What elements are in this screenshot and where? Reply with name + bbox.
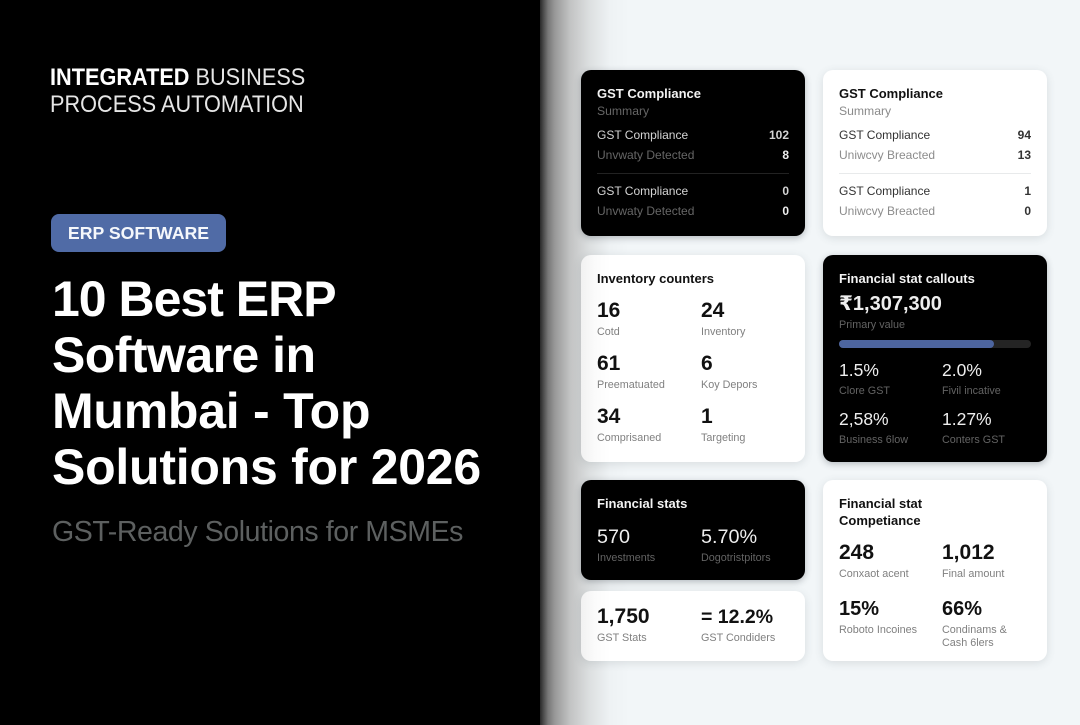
- stat: 2,58%: 2,58%: [839, 409, 889, 429]
- row: second compliance count: [597, 184, 789, 198]
- stat: 16: Cotd: [597, 326, 620, 338]
- card subheading: Summary: [839, 104, 891, 118]
- stat: 2.0%: [942, 360, 1001, 397]
- main title: Solutions for 2026: [52, 439, 481, 495]
- row: compliance count: GST Compliance: [597, 128, 688, 142]
- row: second compliance count: [839, 184, 1031, 198]
- panel: inventory counters: [581, 255, 805, 462]
- panel: GST compliance dark card: [581, 70, 805, 236]
- row: second detected count: 0: [782, 204, 789, 218]
- stat: 2,58%: [839, 409, 908, 446]
- stat: 5.70%: 5.70%: [701, 526, 757, 548]
- stat: 2,58%: Business 6low: [839, 434, 908, 446]
- stat: 34: Comprisaned: [597, 432, 661, 444]
- stat: 1: Targeting: [701, 432, 745, 444]
- row: compliance count: 94: [1018, 128, 1031, 142]
- progress bar: [839, 340, 1031, 348]
- stat: 12.2%: GST Condiders: [701, 632, 775, 644]
- stat: 15%: Roboto Incoines: [839, 624, 917, 636]
- badge: ERP software: ERP SOFTWARE: [68, 223, 209, 243]
- badge: ERP software: [51, 214, 226, 252]
- brand heading: [50, 65, 305, 118]
- stat: 15%: [839, 598, 917, 636]
- row: second compliance count: GST Compliance: [839, 184, 930, 198]
- row: compliance count: [597, 128, 789, 142]
- row: second detected count: [597, 204, 789, 218]
- row: second detected count: Unvwaty Detected: [597, 204, 694, 218]
- stat: 6: Koy Depors: [701, 379, 757, 391]
- stat: 1.27%: 1.27%: [942, 409, 992, 429]
- card heading: Inventory counters: [597, 271, 714, 286]
- stat: 248: 248: [839, 541, 874, 564]
- stat: 1.27%: [942, 409, 1005, 446]
- card heading: Competiance: [839, 513, 921, 528]
- row: second breached count: 0: [1024, 204, 1031, 218]
- stat: 570: [597, 526, 655, 564]
- stat: 12.2%: = 12.2%: [701, 606, 773, 628]
- main title: Software in: [52, 327, 315, 383]
- stat: 61: [597, 352, 665, 391]
- stat: 61: 61: [597, 352, 620, 375]
- stat: 1,750: 1,750: [597, 605, 650, 628]
- panel: financial stats: [581, 480, 805, 580]
- stat: 1.27%: Conters GST: [942, 434, 1005, 446]
- stat: 2.0%: 2.0%: [942, 360, 982, 380]
- subtitle: GST-Ready Solutions for MSMEs: [52, 516, 463, 548]
- card heading: Financial stat callouts: [839, 271, 975, 286]
- card heading: [839, 496, 922, 528]
- main title: 10 Best ERP: [52, 271, 336, 327]
- stat: 24: 24: [701, 299, 724, 322]
- primary value: Primary value: [839, 319, 905, 331]
- panel: left dark background: [0, 0, 540, 725]
- stat: 24: Inventory: [701, 326, 745, 338]
- stat: 248: [839, 541, 909, 580]
- row: second breached count: Uniwcvy Breacted: [839, 204, 935, 218]
- row: second breached count: [839, 204, 1031, 218]
- stat: 248: Conxaot acent: [839, 568, 909, 580]
- stat: 5.70%: [701, 526, 771, 564]
- stat: 1,750: [597, 605, 650, 644]
- row: second compliance count: 0: [782, 184, 789, 198]
- stat: 66%: Condinams &: [942, 624, 1007, 636]
- stat: 1,012: [942, 541, 1004, 580]
- stat: 6: 6: [701, 352, 713, 375]
- stat: 34: 34: [597, 405, 620, 428]
- card heading: Financial stats: [597, 496, 687, 511]
- stat: 66%: [942, 598, 1007, 649]
- stat: 5.70%: Dogotristpitors: [701, 552, 771, 564]
- stat: 34: [597, 405, 661, 444]
- brand heading: INTEGRATED BUSINESS: [50, 65, 305, 91]
- stat: 1,012: Final amount: [942, 568, 1004, 580]
- stat: 1,012: 1,012: [942, 541, 995, 564]
- stat: 61: Preematuated: [597, 379, 665, 391]
- panel: GST compliance light card: [823, 70, 1047, 236]
- stat: 16: 16: [597, 299, 620, 322]
- main title: [52, 271, 481, 495]
- row: compliance count: GST Compliance: [839, 128, 930, 142]
- stat: 66%: 66%: [942, 598, 982, 620]
- row: detected count: 8: [782, 148, 789, 162]
- stat: 1,750: GST Stats: [597, 632, 647, 644]
- row: second compliance count: GST Compliance: [597, 184, 688, 198]
- stat: 1.5%: Clore GST: [839, 385, 890, 397]
- stat: 570: 570: [597, 526, 630, 548]
- row: detected count: Unvwaty Detected: [597, 148, 694, 162]
- card heading: GST Compliance: [597, 86, 701, 101]
- primary value: ₹1,307,300: [839, 293, 942, 315]
- stat: 1: [701, 405, 745, 444]
- card heading: GST Compliance: [839, 86, 943, 101]
- panel: financial stat competiance: [823, 480, 1047, 661]
- stat: 1.5%: 1.5%: [839, 360, 879, 380]
- stat: 15%: 15%: [839, 598, 879, 620]
- brand heading: PROCESS AUTOMATION: [50, 92, 304, 118]
- stat: 12.2%: [701, 606, 775, 644]
- stat: 6: [701, 352, 757, 391]
- row: breached count: 13: [1018, 148, 1031, 162]
- panel: right background: [540, 0, 1080, 725]
- stat: 16: [597, 299, 620, 338]
- stat: 570: Investments: [597, 552, 655, 564]
- panel: GST stats: [581, 591, 805, 661]
- row: detected count: [597, 148, 789, 162]
- stat: 1.5%: [839, 360, 890, 397]
- row: breached count: [839, 148, 1031, 162]
- row: second compliance count: 1: [1024, 184, 1031, 198]
- card heading: Financial stat: [839, 496, 922, 511]
- primary value: [839, 293, 942, 331]
- stat: 66%: Cash 6lers: [942, 637, 994, 649]
- main title: Mumbai - Top: [52, 383, 370, 439]
- stat: 24: [701, 299, 746, 338]
- stat: 2.0%: Fivil incative: [942, 385, 1001, 397]
- row: compliance count: 102: [769, 128, 789, 142]
- card subheading: Summary: [597, 104, 649, 118]
- stat: 1: 1: [701, 405, 713, 428]
- row: breached count: Uniwcvy Breacted: [839, 148, 935, 162]
- row: compliance count: [839, 128, 1031, 142]
- panel: financial stat callouts: [823, 255, 1047, 462]
